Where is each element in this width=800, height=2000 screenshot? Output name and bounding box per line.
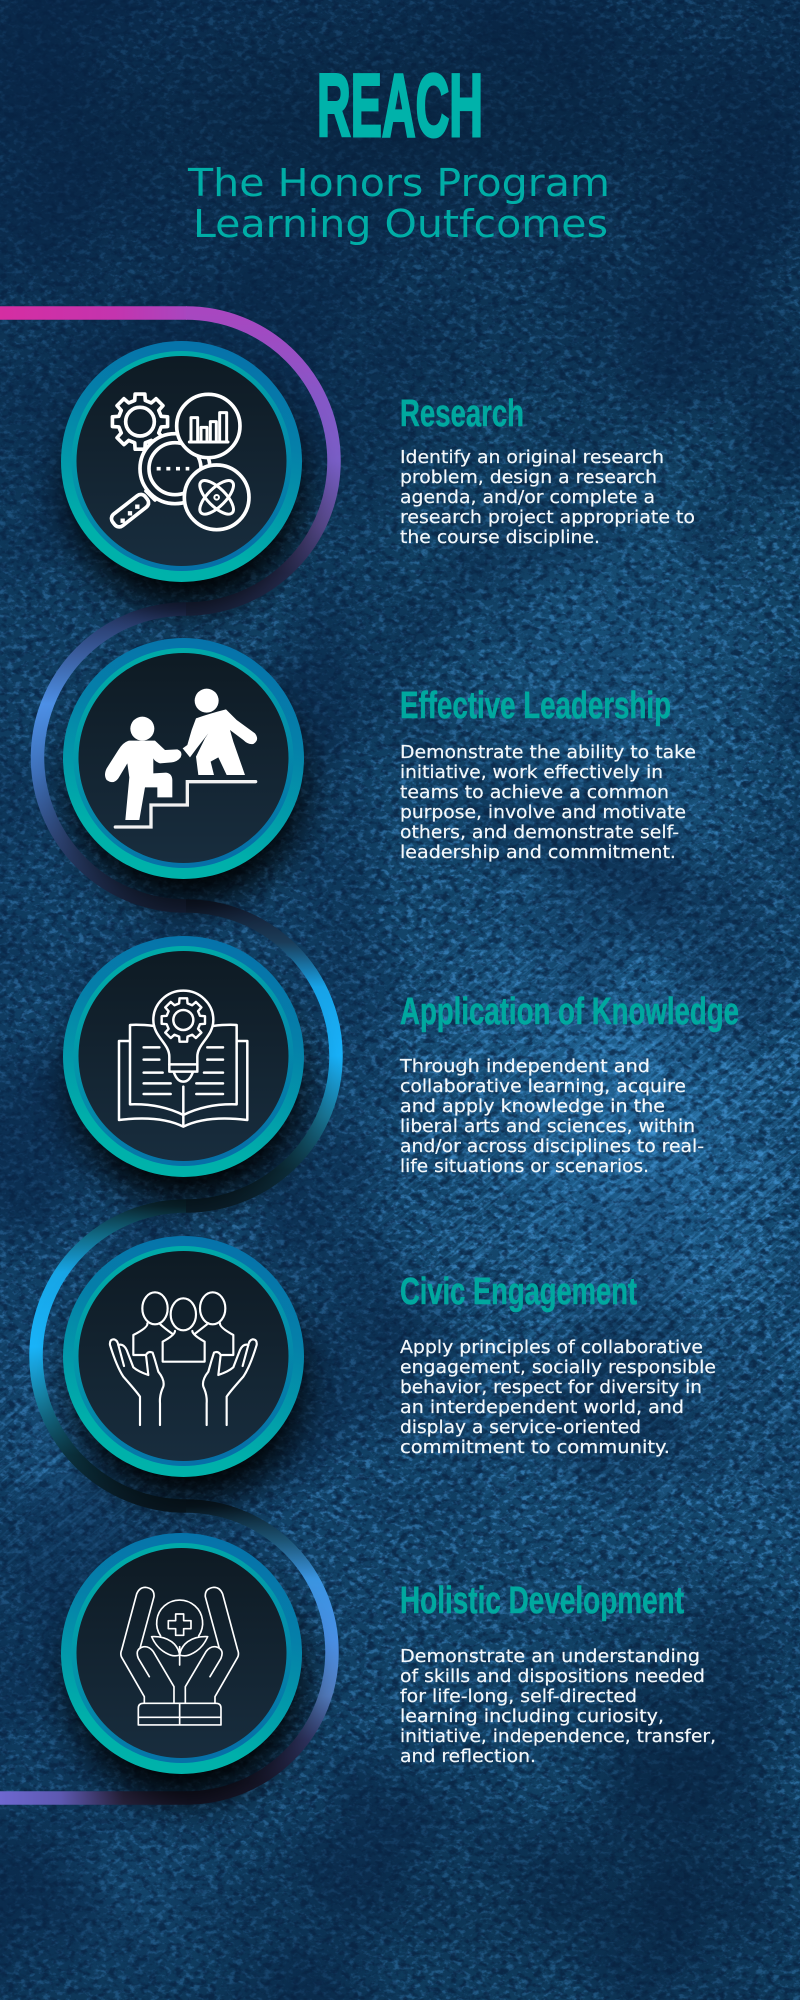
text block: leadership description: purpose, involve and motivate	[400, 803, 686, 823]
text block: civic description: an interdependent world, and	[400, 1398, 684, 1418]
text block: research description: problem, design a research	[400, 468, 657, 488]
text block: knowledge description: Through independent and	[399, 1057, 650, 1077]
text block: civic description: engagement, socially responsible	[400, 1358, 716, 1378]
panel: holistic badge	[61, 1533, 302, 1774]
text block: leadership description: initiative, work effectively in	[400, 763, 663, 783]
panel: civic badge	[63, 1236, 304, 1477]
subtitle: Learning Outfcomes	[193, 202, 608, 246]
text block: leadership description: leadership and commitment.	[400, 843, 676, 863]
text block: knowledge description: and/or across disciplines to real-	[400, 1137, 704, 1157]
panel: knowledge badge	[63, 936, 304, 1177]
text block: holistic description: for life-long, self-directed	[400, 1687, 637, 1707]
text block: knowledge description	[399, 1057, 704, 1177]
text block: holistic description: learning including curiosity,	[400, 1707, 664, 1727]
circle drop shadows	[70, 374, 304, 1798]
text block: civic description	[400, 1338, 716, 1458]
heading: Civic Engagement: Civic Engagement	[400, 1271, 637, 1313]
text block: civic description: commitment to community.	[400, 1438, 670, 1458]
heading: Holistic Development: Holistic Development	[400, 1580, 684, 1622]
subtitle	[187, 161, 610, 246]
text block: civic description: behavior, respect for diversity in	[400, 1378, 702, 1398]
text block: holistic description: of skills and dispositions needed	[400, 1667, 705, 1687]
icon: hands holding plant and cross	[121, 1587, 238, 1725]
text block: leadership description: Demonstrate the ability to take	[400, 743, 696, 763]
icon: community held in hands	[110, 1292, 257, 1425]
winding gradient path connecting the circles	[0, 313, 336, 1798]
heading: Effective Leadership: Effective Leadership	[400, 685, 671, 727]
text block: research description: the course discipline.	[400, 528, 600, 548]
text block: holistic description: and reflection.	[400, 1747, 536, 1767]
title: REACH: REACH	[317, 55, 483, 155]
panel: research badge	[61, 341, 302, 582]
text block: civic description: Apply principles of collaborative	[400, 1338, 703, 1358]
text block: research description: Identify an original research	[400, 448, 664, 468]
subtitle: The Honors Program	[187, 161, 610, 205]
text block: leadership description: others, and demonstrate self-	[400, 823, 679, 843]
text block: knowledge description: life situations or scenarios.	[400, 1157, 649, 1177]
text block: knowledge description: and apply knowledge in the	[400, 1097, 665, 1117]
icon: research gear, chart, magnifier, atom	[109, 394, 249, 530]
heading: Research: Research	[400, 393, 524, 435]
text block: leadership description: teams to achieve a common	[400, 783, 669, 803]
text block: research description: research project appropriate to	[400, 508, 695, 528]
text block: leadership description	[400, 743, 696, 863]
text block: knowledge description: collaborative learning, acquire	[400, 1077, 686, 1097]
text block: holistic description	[400, 1647, 716, 1767]
icon: book with light bulb	[119, 991, 247, 1127]
text block: knowledge description: liberal arts and sciences, within	[400, 1117, 695, 1137]
text block: holistic description: Demonstrate an understanding	[400, 1647, 700, 1667]
text block: research description: agenda, and/or complete a	[400, 488, 655, 508]
panel: leadership badge	[63, 638, 304, 879]
text block: civic description: display a service-oriented	[400, 1418, 641, 1438]
text block: holistic description: initiative, independence, transfer,	[400, 1727, 716, 1747]
text block: research description	[400, 448, 695, 548]
icon: two people climbing stairs	[105, 689, 257, 827]
